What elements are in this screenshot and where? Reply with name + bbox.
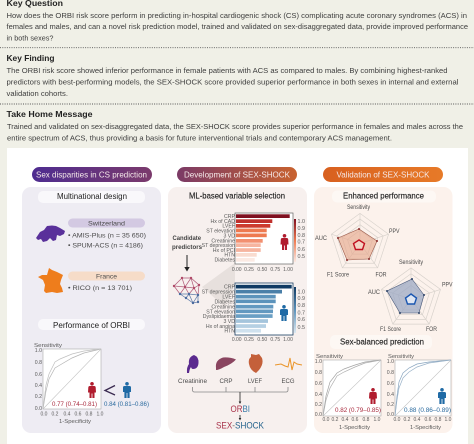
panel background	[314, 187, 452, 433]
radar chart: male: AUC	[368, 289, 380, 296]
header pill: validation	[323, 167, 443, 182]
ROC chart: male: 1.0	[387, 359, 394, 365]
bar chart: male variable importance: 0.7	[298, 310, 305, 316]
bar chart: female variable importance: 1.0	[298, 219, 305, 225]
key finding text: The ORBI risk score showed inferior performance in female patients with ACS as compared to males. By combining highest-ranked	[6, 66, 448, 75]
take home text: Trained and validated on sex-disaggregated data, the SEX-SHOCK score provides superior performance in females and males across the	[7, 122, 463, 131]
ROC chart: ORBI: 1.0	[35, 348, 42, 354]
ROC chart: female: 0.0	[315, 412, 322, 418]
male AUC value: 0.88 (0.86–0.89)	[404, 407, 451, 414]
bar chart: male variable importance: 0.50	[257, 337, 267, 343]
key finding text: predictors with best-performing models, the SEX-SHOCK score provided superior performance in both sexes in internal and external	[6, 78, 459, 86]
ROC chart: male	[387, 354, 452, 431]
candidate predictors label: predictors	[172, 244, 202, 251]
SEX-SHOCK label: SEX-SHOCK	[216, 420, 265, 432]
ROC chart: ORBI: 0.8	[35, 360, 42, 366]
take home text: entire spectrum of ACS, thus providing a basis for future interventional trials and contemporary ACS management.	[7, 134, 392, 142]
ROC chart: female: 0.0	[323, 417, 330, 423]
key question text: females and males, and can a novel risk prediction model, trained and validated on sex-disaggregated data, provide improved performance	[6, 22, 468, 31]
female AUC value: 0.77 (0.74–0.81)	[52, 401, 97, 408]
key question text: in both sexes?	[6, 34, 54, 42]
bar chart: female variable importance: 0.00	[232, 267, 242, 273]
candidate predictors label	[172, 235, 202, 251]
subheading: sex-balanced prediction	[330, 335, 432, 349]
icon: map of Switzerland	[36, 226, 65, 242]
subheading: performance of ORBI: Performance of ORBI	[53, 320, 130, 330]
bar chart: female variable importance: 0.75	[270, 267, 280, 273]
ROC chart: ORBI: 1.0	[97, 412, 104, 418]
radar chart: female: F1 Score	[327, 272, 349, 278]
label: Switzerland	[68, 218, 145, 228]
ROC chart: male: 0.4	[414, 417, 421, 423]
bar chart: male variable importance: ST depression	[202, 290, 235, 296]
panel background	[22, 187, 161, 433]
bar chart: female variable importance: Hx of PCI	[213, 248, 235, 254]
bar chart: female variable importance: CRP	[224, 214, 236, 220]
header pill: sex disparities: Sex disparities in CS prediction	[36, 170, 147, 180]
bar chart: female variable importance	[202, 213, 305, 273]
ROC chart: female: 0.4	[315, 392, 322, 398]
French cohort: • RICO (n = 13 701)	[68, 285, 132, 292]
panel: sex disparities in CS prediction	[22, 167, 161, 433]
subheading: enhanced performance: Enhanced performance	[343, 191, 424, 201]
icon: female figure in chart	[280, 234, 288, 250]
icon: heart	[249, 354, 263, 373]
bar chart: male variable importance: 0.25	[244, 337, 254, 343]
ROC chart: female: Sensitivity	[316, 354, 343, 360]
arrow: ORBI to SEX-SHOCK	[239, 415, 241, 420]
radar chart: female: PPV	[389, 228, 400, 235]
bar chart: male variable importance: Creatinine	[211, 305, 235, 311]
radar chart: female: FOR	[376, 272, 387, 278]
ROC chart: male: 0.8	[435, 417, 442, 423]
bar chart: female variable importance: 0.6	[298, 247, 305, 253]
key finding section	[6, 53, 459, 98]
radar chart: male	[368, 259, 453, 333]
ROC chart: ORBI: 0.0	[35, 406, 42, 412]
Swiss cohorts: • AMIS-Plus (n = 35 650)	[68, 232, 146, 240]
ROC chart: ORBI	[34, 343, 104, 425]
header pill: sex disparities	[32, 167, 152, 182]
header pill: development	[177, 167, 297, 182]
subheading: ML-based variable selection: ML-based variable selection	[189, 191, 285, 201]
predictor labels: ECG	[282, 378, 294, 385]
network icon	[173, 277, 200, 304]
ROC chart: ORBI: 0.2	[35, 394, 42, 400]
ROC chart: ORBI: 0.2	[52, 412, 59, 418]
take home heading: Take Home Message	[6, 109, 93, 119]
icon: male figure in chart	[280, 305, 288, 321]
icon: female figure	[369, 388, 377, 404]
ORBI label: ORBI	[230, 404, 250, 414]
ROC chart: female: 0.2	[332, 417, 339, 423]
bar chart: female variable importance: 1.00	[283, 267, 293, 273]
key finding text: validation cohorts.	[6, 89, 68, 98]
bar chart: female variable importance: 0.8	[298, 233, 305, 239]
icon: ECG trace	[275, 358, 302, 370]
icon: liver	[216, 357, 236, 370]
label: Switzerland: Switzerland	[88, 220, 125, 228]
bar chart: female variable importance: 0.25	[244, 267, 254, 273]
panel: development of SEX-SHOCK	[168, 167, 307, 433]
ROC chart: male: 0.4	[387, 392, 394, 398]
bar chart: male variable importance: LVEF	[222, 295, 235, 301]
predictor labels: CRP	[220, 378, 233, 385]
ROC chart: ORBI: 0.8	[86, 412, 93, 418]
bar chart: male variable importance: 0.00	[232, 337, 242, 343]
key finding heading: Key Finding	[6, 53, 54, 63]
ROC chart: female	[315, 354, 381, 431]
white graphical abstract background	[7, 148, 468, 444]
ROC chart: female: 0.2	[315, 402, 322, 408]
bar chart: male variable importance: Hx of angina	[206, 324, 235, 330]
bar chart: male variable importance: Dyslipidaemia	[203, 314, 235, 320]
bar chart: female variable importance: Diabetes	[215, 258, 235, 264]
ROC chart: male: 0.6	[425, 417, 432, 423]
panel background	[168, 187, 307, 433]
bar chart: female variable importance: HTN	[224, 253, 235, 259]
key finding text	[6, 66, 459, 98]
radar chart: male: Sensitivity	[399, 259, 424, 266]
bar chart: male variable importance: 0.9	[298, 296, 305, 302]
candidate predictors label: Candidate	[172, 235, 201, 242]
radar chart: male: PPV	[442, 282, 453, 289]
bar chart: male variable importance	[202, 283, 305, 343]
label: France	[68, 272, 145, 280]
bar chart: male variable importance: 1.0	[298, 290, 305, 296]
bar chart: male variable importance: 0.75	[270, 337, 280, 343]
bar chart: male variable importance: 0.8	[298, 303, 305, 309]
ROC chart: female: 1.0	[374, 417, 381, 423]
bar chart: female variable importance: 0.7	[298, 240, 305, 246]
icon: male figure	[438, 388, 446, 404]
Swiss cohorts: • SPUM-ACS (n = 4186)	[68, 242, 143, 250]
ROC chart: ORBI: 0.4	[64, 412, 71, 418]
label: France: France	[96, 274, 117, 280]
radar chart: female: Sensitivity	[347, 204, 371, 211]
bar chart: female variable importance: Creatinine	[211, 239, 235, 245]
ROC chart: female: 0.8	[363, 417, 370, 423]
ROC chart: female: 0.8	[315, 370, 322, 376]
funnel shading	[202, 263, 235, 307]
female AUC value: 0.82 (0.79–0.85)	[335, 407, 381, 414]
radar chart: female	[315, 204, 400, 278]
take home text	[7, 122, 463, 142]
radar chart: female: AUC	[315, 235, 327, 242]
bar chart: male variable importance: 1.00	[283, 337, 293, 343]
bracket joining predictors	[192, 387, 288, 392]
ROC chart: ORBI: 0.0	[41, 412, 48, 418]
ROC chart: female: 1-Specificity	[339, 425, 370, 431]
less-than sign	[105, 386, 115, 395]
ROC chart: female: 1.0	[315, 359, 322, 365]
radar chart: male: FOR	[426, 326, 437, 333]
ROC chart: male: 1.0	[445, 417, 452, 423]
bar chart: female variable importance: 0.50	[257, 267, 267, 273]
subheading: sex-balanced prediction: Sex-balanced prediction	[340, 336, 424, 346]
ROC chart: male: 0.2	[387, 402, 394, 408]
ROC chart: male: 0.0	[387, 412, 394, 418]
key question section	[6, 0, 468, 42]
predictor labels: Creatinine	[178, 378, 207, 385]
icon: male figure	[123, 382, 131, 398]
icon: map of France	[38, 268, 63, 293]
ROC chart: female: 0.6	[352, 417, 359, 423]
panel: validation of SEX-SHOCK	[314, 167, 453, 433]
subheading: multinational design: Multinational design	[57, 191, 127, 201]
bar chart: male variable importance: Diabetes	[215, 300, 235, 306]
bar chart: female variable importance: Hx of CAD	[210, 219, 235, 225]
ROC chart: ORBI: 0.6	[35, 372, 42, 378]
Swiss cohorts	[68, 232, 146, 250]
bar chart: male variable importance: HTN	[224, 329, 235, 335]
key question text: How does the ORBI risk score perform in predicting in-hospital cardiogenic shock (CS) complicating acute coronary syndromes (ACS) in	[6, 11, 467, 20]
ROC chart: ORBI: 1-Specificity	[59, 419, 91, 425]
bar chart: female variable importance: ST elevation	[206, 228, 235, 234]
ROC chart: female: 0.6	[315, 381, 322, 387]
ROC chart: male: 0.0	[394, 417, 401, 423]
bar chart: male variable importance: ST elevation	[206, 309, 235, 315]
ROC chart: female: 0.4	[342, 417, 349, 423]
bar chart: female variable importance: LVEF	[222, 224, 235, 230]
ROC chart: male: 1-Specificity	[410, 425, 441, 431]
bar chart: female variable importance: 0.9	[298, 226, 305, 232]
bar chart: female variable importance: 3 VD	[223, 233, 235, 239]
icon: kidney	[187, 355, 199, 373]
bar chart: male variable importance: 0.5	[298, 325, 305, 331]
header pill: validation: Validation of SEX-SHOCK	[336, 170, 430, 180]
arrow: predictors to network	[184, 255, 190, 272]
ROC chart: male: Sensitivity	[388, 354, 414, 360]
ROC chart: ORBI: Sensitivity	[34, 343, 62, 349]
icon: female figure	[88, 382, 96, 398]
subheading: multinational design	[38, 191, 145, 203]
radar chart: male: F1 Score	[380, 326, 401, 333]
ROC chart: male: 0.6	[387, 381, 394, 387]
bar chart: female variable importance: 0.5	[298, 254, 305, 260]
ROC chart: male: 0.8	[387, 370, 394, 376]
header pill: development: Development of SEX-SHOCK	[184, 170, 290, 180]
ROC chart: ORBI: 0.6	[75, 412, 82, 418]
bar chart: male variable importance: 3 VD	[223, 319, 235, 325]
take home message section	[6, 109, 463, 142]
bar chart: male variable importance: 0.6	[298, 317, 305, 323]
ROC chart: ORBI: 0.4	[35, 383, 42, 389]
male AUC value: 0.84 (0.81–0.86)	[104, 401, 149, 408]
ROC chart: male: 0.2	[404, 417, 411, 423]
predictor labels: LVEF	[248, 378, 262, 385]
predictor labels	[178, 378, 294, 385]
subheading: performance of ORBI	[38, 319, 145, 330]
arrow: bracket to ORBI	[239, 392, 241, 404]
bar chart: male variable importance: CRP	[224, 285, 236, 291]
key question text	[6, 11, 468, 42]
bar chart: female variable importance: ST depression	[202, 243, 235, 249]
